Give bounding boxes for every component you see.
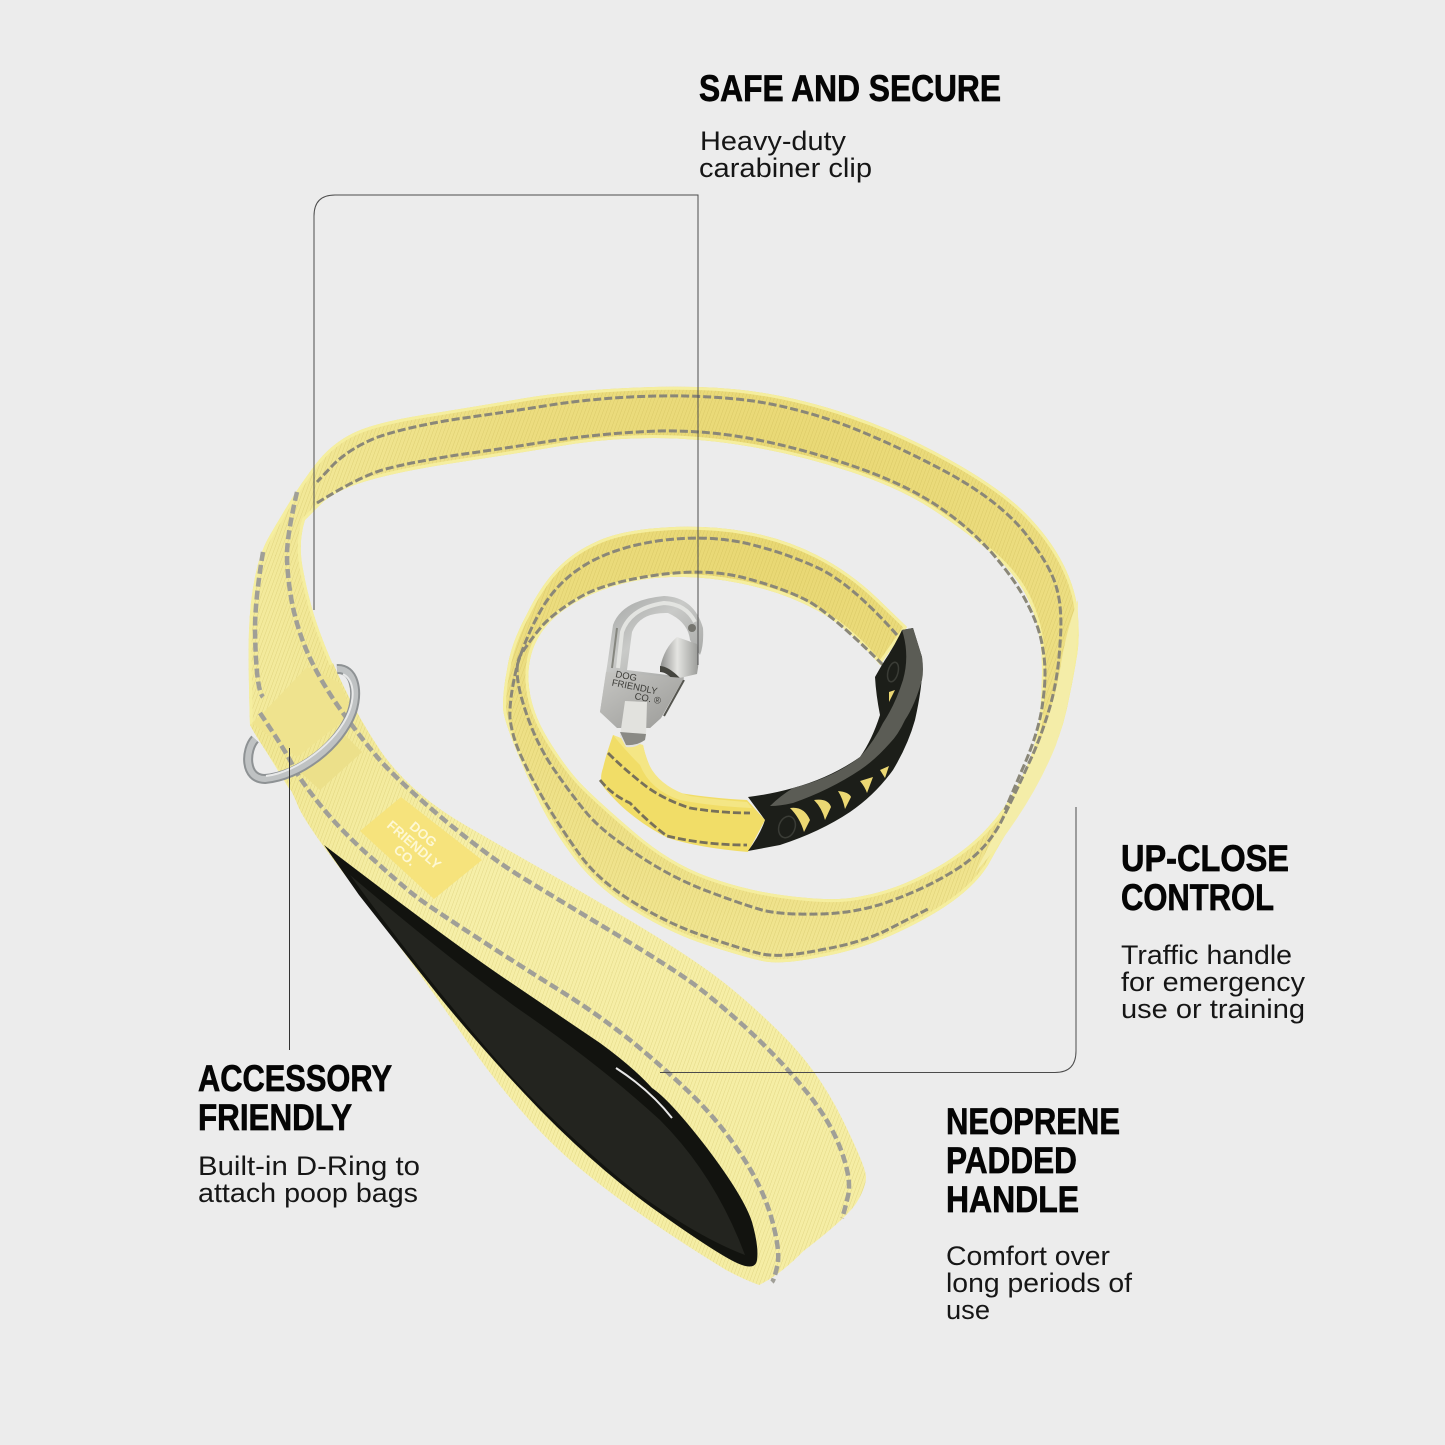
gate pin xyxy=(688,624,696,632)
callout line: accessory friendly xyxy=(288,748,290,1050)
heading: neoprene padded handle xyxy=(946,1100,1120,1220)
text: up-close control description: for emergency xyxy=(1121,967,1306,997)
yellow clip-end loop xyxy=(600,735,765,852)
leash webbing band xyxy=(249,387,1079,962)
engraved logo: CO. ® xyxy=(634,691,662,707)
engraved logo: FRIENDLY xyxy=(611,678,659,697)
leash illustration xyxy=(248,387,1079,1285)
woven loop across the D-ring xyxy=(252,667,353,757)
callout line: neoprene padded handle xyxy=(660,807,1076,1072)
engraved logo: DOG xyxy=(614,669,638,684)
grey handle top face xyxy=(770,628,923,806)
text: safe and secure description: carabiner clip xyxy=(699,153,872,183)
carabiner plate xyxy=(600,672,684,728)
heading: accessory friendly: ACCESSORY xyxy=(198,1057,392,1099)
brand patch: DOG xyxy=(407,819,440,850)
reflective stitching on the band xyxy=(317,396,1061,955)
heading: safe and secure: SAFE AND SECURE xyxy=(699,67,1001,109)
handle rivet xyxy=(776,814,798,840)
brand patch: CO. xyxy=(391,842,419,869)
heading: up-close control xyxy=(1121,837,1289,918)
text: safe and secure description: Heavy-duty xyxy=(700,126,847,156)
text: safe and secure description xyxy=(699,126,872,183)
text: up-close control description xyxy=(1121,940,1306,1024)
text: neoprene padded handle description: use xyxy=(946,1295,990,1325)
text: up-close control description: use or training xyxy=(1121,994,1305,1024)
text: up-close control description: Traffic handle xyxy=(1121,940,1292,970)
heading: up-close control: UP-CLOSE xyxy=(1121,837,1289,879)
rubber traffic handle xyxy=(748,628,923,851)
black handle body xyxy=(748,628,922,851)
brand patch xyxy=(360,797,482,899)
swivel stem xyxy=(620,701,647,747)
carabiner body xyxy=(600,596,703,728)
yellow handle openings xyxy=(790,690,895,832)
carabiner clip xyxy=(600,596,703,747)
heading: neoprene padded handle: NEOPRENE xyxy=(946,1100,1120,1142)
heading: accessory friendly xyxy=(198,1057,392,1138)
heading: neoprene padded handle: HANDLE xyxy=(946,1178,1079,1220)
heading: neoprene padded handle: PADDED xyxy=(946,1139,1077,1181)
text: accessory friendly description xyxy=(198,1151,420,1208)
infographic canvas xyxy=(198,74,1305,1320)
heading: up-close control: CONTROL xyxy=(1121,876,1274,918)
screw gate barrel xyxy=(660,637,698,678)
text: neoprene padded handle description xyxy=(946,1241,1133,1325)
callout line: safe and secure xyxy=(314,195,698,665)
heading: accessory friendly: FRIENDLY xyxy=(198,1096,352,1138)
engraved logo xyxy=(609,669,665,707)
text: neoprene padded handle description: long periods of xyxy=(946,1268,1133,1298)
handle stitching xyxy=(255,492,849,1282)
text: accessory friendly description: Built-in D-Ring to xyxy=(198,1151,420,1181)
neoprene padding xyxy=(324,845,757,1266)
text: neoprene padded handle description: Comfort over xyxy=(946,1241,1110,1271)
padded handle loop xyxy=(250,492,866,1285)
brand patch: FRIENDLY xyxy=(384,817,444,872)
text: accessory friendly description: attach poop bags xyxy=(198,1178,418,1208)
D-ring xyxy=(248,669,355,779)
